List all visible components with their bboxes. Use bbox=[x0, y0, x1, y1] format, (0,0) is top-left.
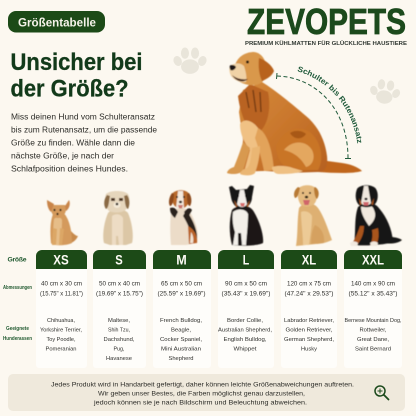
size column S bbox=[93, 250, 146, 368]
size column S: Shih Tzu, bbox=[108, 328, 130, 334]
tagline: PREMIUM KÜHLMATTEN FÜR GLÜCKLICHE HAUSTIERE bbox=[245, 40, 407, 47]
size column M: French Bulldog, bbox=[160, 318, 202, 324]
intro text: bis zum Rutenansatz, um die passende bbox=[11, 126, 157, 134]
size column M: (25.59" x 19.69") bbox=[158, 290, 206, 298]
size column L bbox=[218, 250, 274, 368]
size column XS: XS bbox=[53, 252, 69, 268]
size tag pill: Größentabelle bbox=[18, 17, 96, 29]
size column M: Shepherd bbox=[168, 356, 194, 362]
size column XL: 120 cm x 75 cm bbox=[287, 280, 331, 288]
icon: paw left bbox=[172, 48, 208, 74]
disclaimer panel bbox=[8, 374, 405, 411]
size column XL: Golden Retriever, bbox=[286, 328, 333, 334]
dog: golden labrador XL bbox=[294, 185, 332, 246]
size column L: English Bulldog, bbox=[224, 337, 267, 343]
golden retriever illustration bbox=[227, 52, 362, 175]
size column L: Border Collie, bbox=[227, 318, 263, 324]
intro text: Schlafposition deines Hundes. bbox=[11, 164, 128, 174]
size column L: (35.43" x 19.69") bbox=[222, 290, 270, 298]
size column S: Dachshund, bbox=[104, 337, 135, 343]
size column XS: Chihuahua, bbox=[47, 318, 75, 324]
size column XXL: XXL bbox=[362, 252, 384, 268]
size column S: Maltese, bbox=[108, 318, 130, 324]
dog: bernese XXL bbox=[350, 185, 402, 246]
size column XS: Toy Poodle, bbox=[46, 337, 76, 343]
icon: magnifier bbox=[375, 386, 388, 400]
row label: Größe: Größe bbox=[8, 256, 27, 264]
size column XXL: Rottweiler, bbox=[360, 328, 387, 334]
size column L: Whippet bbox=[234, 346, 257, 352]
size column S: Pug, bbox=[114, 346, 125, 352]
size column M bbox=[153, 250, 211, 368]
size column XXL: Saint Bernard bbox=[355, 346, 391, 352]
size column XXL: Great Dane, bbox=[357, 337, 389, 343]
disclaimer panel: jedoch können sie je nach Bildschirm und Beleuchtung abweichen. bbox=[93, 400, 307, 406]
row label: Abmessungen: Abmessungen bbox=[3, 285, 32, 291]
row label: Geeignete Hunderassen bbox=[3, 326, 32, 342]
size column XS: Yorkshire Terrier, bbox=[40, 328, 82, 334]
size column L: L bbox=[243, 252, 249, 268]
size column L: Australian Shepherd, bbox=[218, 328, 272, 334]
size column M: Mini Australian bbox=[161, 346, 201, 352]
size column M: 65 cm x 50 cm bbox=[161, 280, 202, 288]
dog: border collie L bbox=[229, 185, 263, 246]
size column S: Havanese bbox=[106, 356, 132, 362]
disclaimer panel: Jedes Produkt wird in Handarbeit gefertigt, daher können leichte Größenabweichungen auftreten. bbox=[51, 382, 354, 388]
size column XL: XL bbox=[302, 252, 316, 268]
size column XL: Husky bbox=[301, 346, 317, 352]
size column XL: Labrador Retriever, bbox=[284, 318, 334, 324]
size column S: S bbox=[115, 252, 123, 268]
heading bbox=[10, 49, 142, 102]
size column M: Cocker Spaniel, bbox=[160, 337, 202, 343]
disclaimer panel: Wir geben unser Bestes, die Farben möglichst genau darzustellen, bbox=[98, 390, 305, 398]
size column M: M bbox=[176, 252, 187, 268]
size column XXL: 140 cm x 90 cm bbox=[351, 280, 395, 288]
intro text bbox=[11, 112, 157, 174]
size column XS: Pomeranian bbox=[46, 346, 76, 352]
heading: Unsicher bei bbox=[10, 49, 142, 76]
row label: Geeignete Hunderassen: Geeignete bbox=[6, 326, 29, 332]
dog: chihuahua XS bbox=[47, 200, 78, 245]
size column L: 90 cm x 50 cm bbox=[225, 280, 267, 288]
heading: der Größe? bbox=[10, 76, 128, 102]
size column S: 50 cm x 40 cm bbox=[99, 280, 140, 288]
intro text: Größe zu finden. Wähle dann die bbox=[11, 138, 135, 148]
intro text: nächste Größe, je nach der bbox=[11, 152, 114, 160]
row label: Geeignete Hunderassen: Hunderassen bbox=[3, 336, 32, 342]
dog: beagle M bbox=[169, 190, 198, 245]
size column XXL: (55.12" x 35.43") bbox=[348, 290, 398, 298]
size column XL: (47.24" x 29.53") bbox=[284, 290, 334, 298]
size column XS: 40 cm x 30 cm bbox=[41, 280, 82, 288]
size column XL: German Shepherd, bbox=[284, 337, 334, 343]
measurement arc bbox=[276, 73, 351, 158]
size column XS: (15.75" x 11.81") bbox=[40, 290, 83, 298]
icon: paw right bbox=[367, 78, 403, 106]
size tag pill bbox=[8, 11, 105, 32]
size column XXL: Bernese Mountain Dog, bbox=[344, 318, 402, 324]
size column XXL bbox=[344, 250, 402, 368]
size column S: (19.69" x 15.75") bbox=[96, 290, 143, 298]
arc label: Schulter bis Rutenansatz bbox=[298, 66, 362, 144]
size column XL bbox=[281, 250, 337, 368]
dog: shih tzu S bbox=[103, 191, 133, 245]
size column M: Beagle, bbox=[171, 328, 191, 334]
size column XS bbox=[36, 250, 87, 368]
intro text: Miss deinen Hund vom Schulteransatz bbox=[11, 112, 155, 122]
